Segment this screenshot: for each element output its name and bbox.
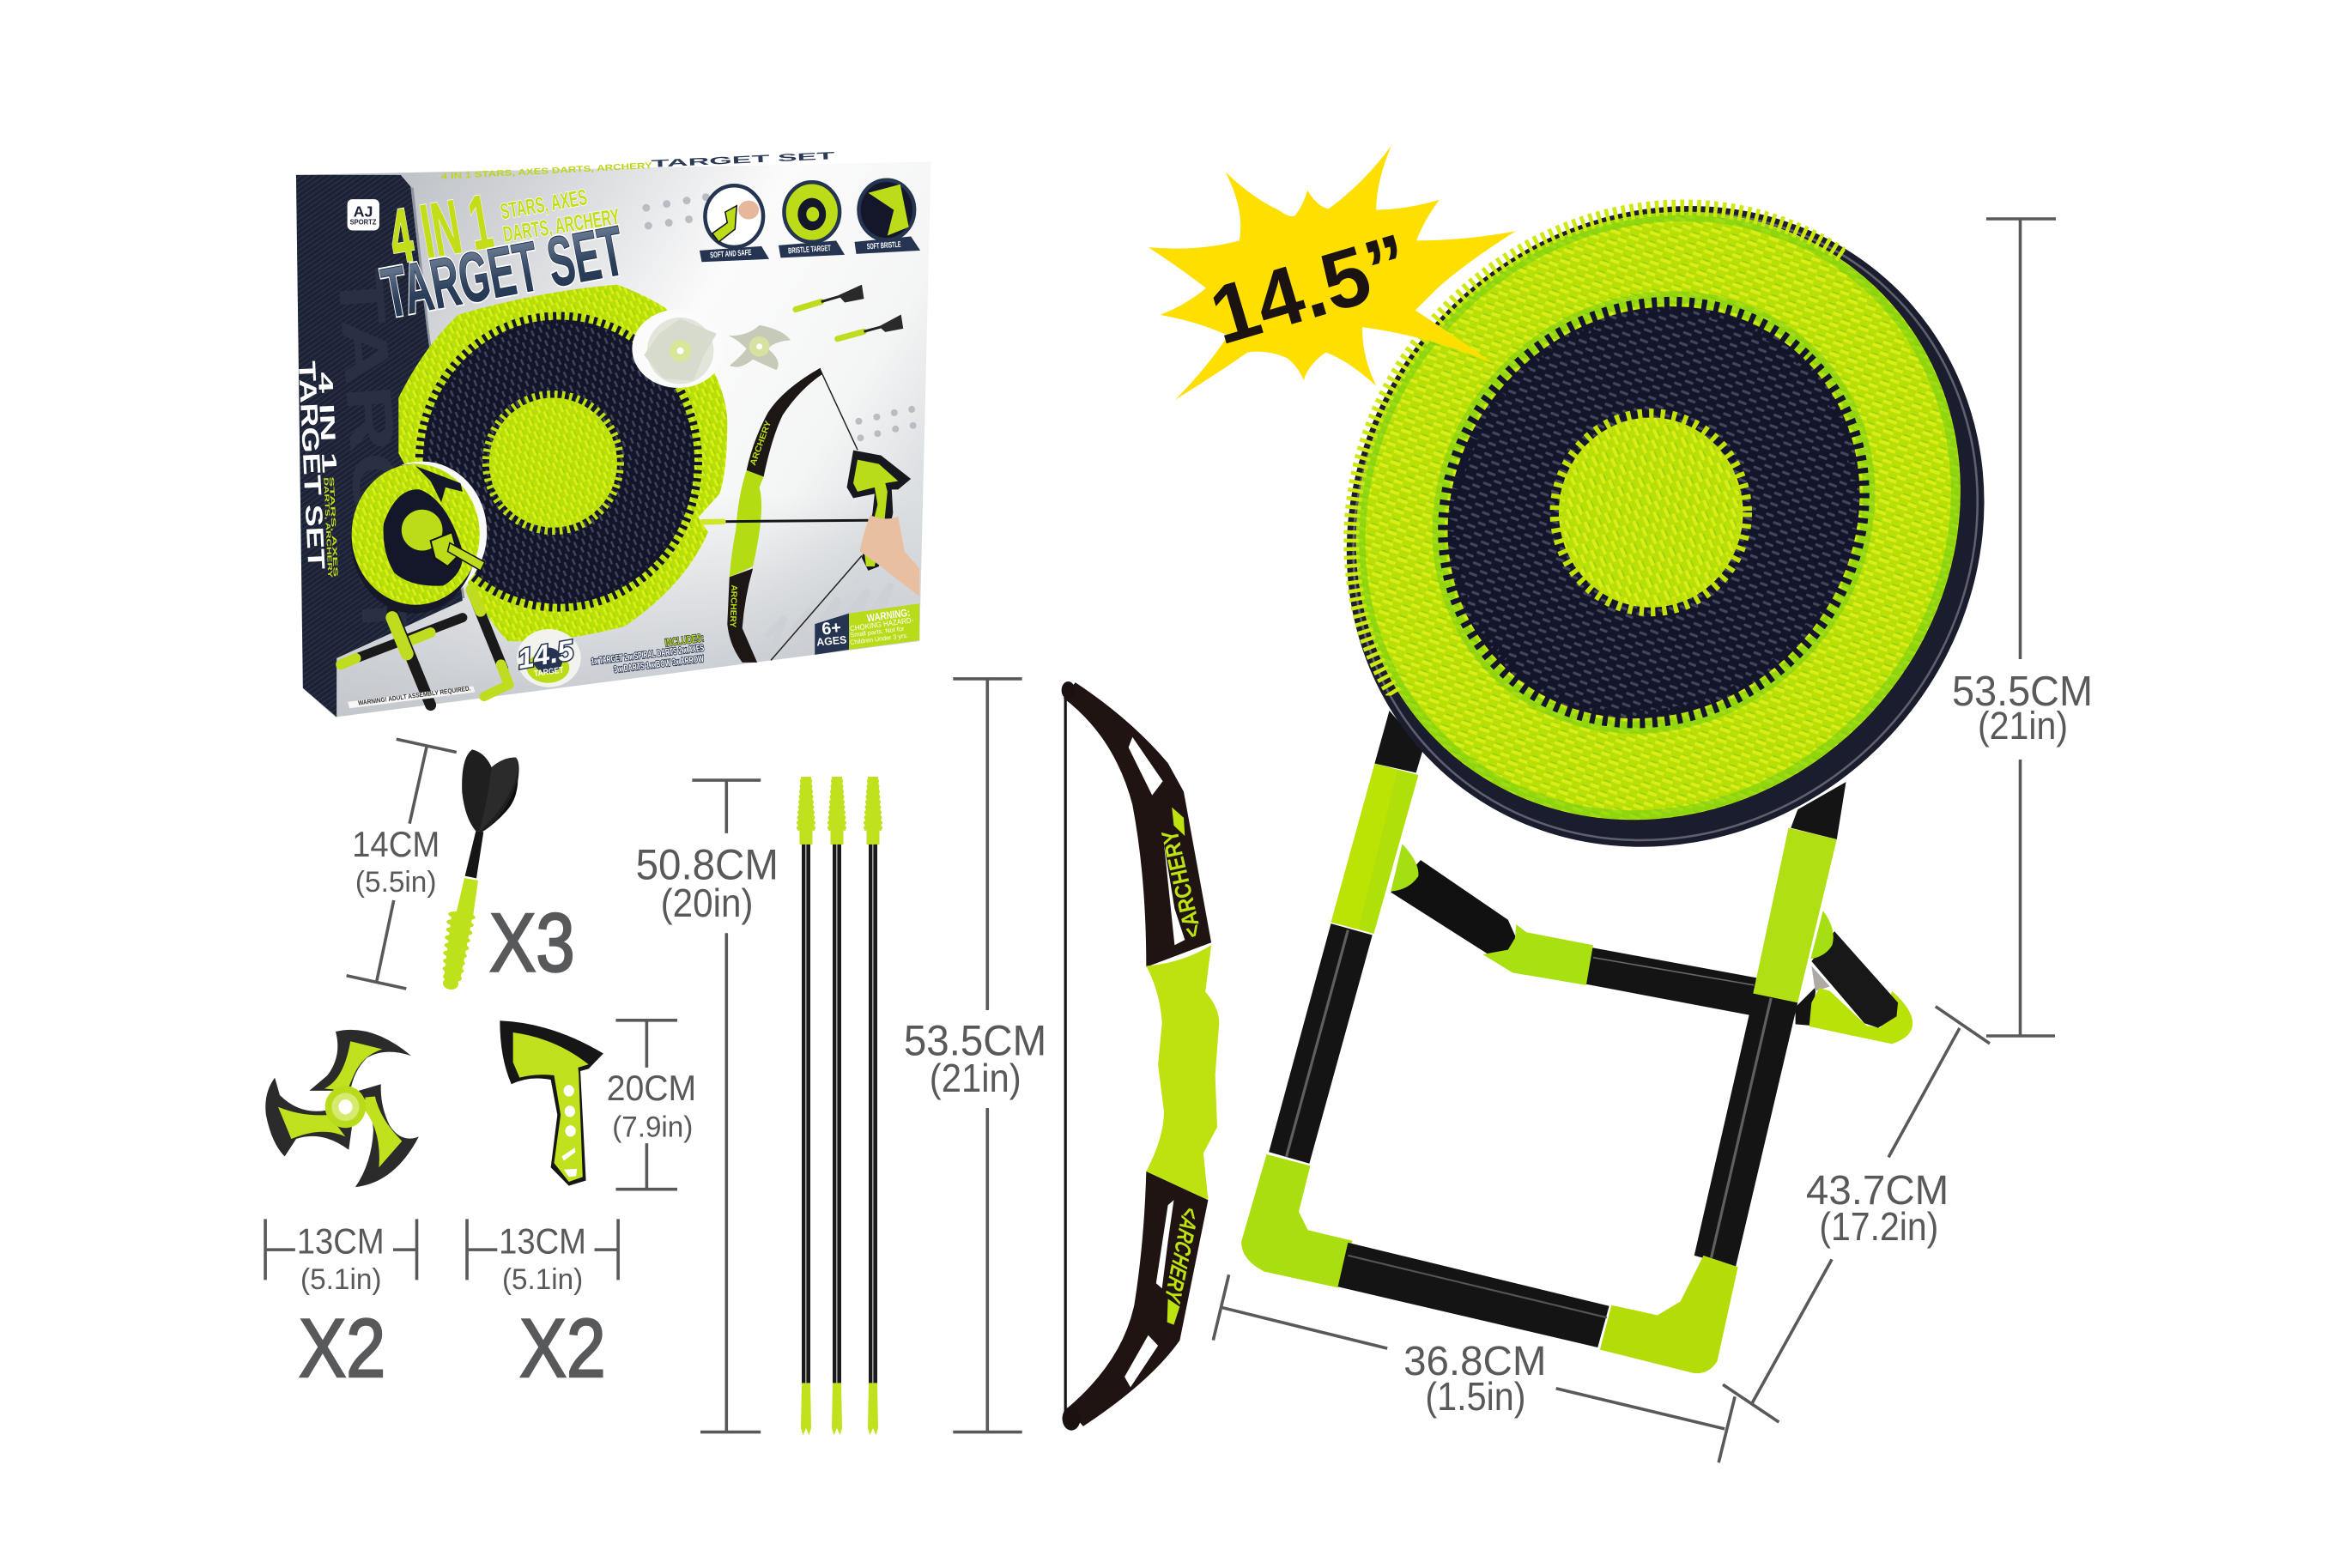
bristle face [1231,88,2086,945]
bow dimension: 53.5CM [904,1018,1046,1065]
bow dimension [904,679,1046,1432]
size badge [515,629,581,687]
box top edge text [441,149,837,182]
feature icons: SOFT AND SAFE [710,248,752,260]
upper limb windows [1129,737,1163,796]
box background chevrons [591,584,892,680]
axe and hand on box [847,451,919,596]
box top edge text: 4 IN 1 STARS, AXES DARTS, ARCHERY [441,161,653,182]
dimension: stand depth 43.7CM [1723,1007,1990,1422]
axe width dimension: (5.1in) [502,1262,583,1296]
big target on box [398,285,727,641]
box title: TARGET SET [377,212,630,333]
box spine [296,175,463,717]
star width dimension [265,1219,417,1296]
feature icons: SOFT BRISTLE [866,240,901,251]
left knob [1391,844,1418,892]
dart dimension [347,739,457,989]
left sleeve [1331,764,1418,934]
bottom tip [1063,1407,1081,1431]
dimension: stand depth 43.7CM: (17.2in) [1819,1205,1938,1249]
cross bar rear section [1796,986,1816,1026]
box title: TARGET SET [377,212,630,333]
age and warning labels [815,603,919,655]
left sleeve shade [1359,770,1418,934]
brace shadow [1811,966,1830,991]
assembly warning pill: WARNING! ADULT ASSEMBLY REQUIRED. [358,684,471,707]
lower chevron [1167,1299,1179,1325]
star width dimension: (5.1in) [300,1262,382,1296]
axe width dimension: 13CM [499,1221,586,1262]
left leg upper tube [1374,711,1423,772]
box title: STARS, AXES [499,185,589,224]
rear foot [1809,988,1913,1044]
star width dimension: 13CM [297,1221,385,1262]
dart [442,749,519,990]
lower limb windows [1124,1335,1158,1387]
brand logo [348,199,379,230]
dimension: stand height 53.5CM: 53.5CM [1952,669,2093,715]
dimension: stand width 36.8CM: (1.5in) [1425,1375,1526,1420]
size badge: 14.5 [515,633,577,675]
axe height dimension: 20CM [607,1069,696,1108]
box title: DARTS, ARCHERY [501,205,621,247]
box front face [296,161,931,717]
axe height dimension [607,1020,696,1190]
spine edge shade [401,185,464,598]
left leg lower tube [1269,923,1373,1164]
age and warning labels: Small parts. Not for [850,625,905,639]
dimension: stand depth 43.7CM: 43.7CM [1806,1167,1949,1213]
brand logo: SPORTZ [350,218,376,227]
box title: 4 IN 1 [384,179,498,280]
right sleeve [1753,828,1837,1002]
right leg lower tube [1694,993,1797,1267]
arrow 1 [797,777,815,1435]
bottom tube highlight [1348,1256,1607,1317]
center joint [1482,924,1593,985]
feature icons: BRISTLE TARGET [788,244,831,256]
spine text [294,360,341,578]
arrow 2 [827,777,846,1435]
dimension: stand width 36.8CM: 36.8CM [1403,1338,1546,1384]
bullseye [1559,418,1743,608]
box lower shade [296,161,931,717]
spine ghost lettering: TARGET [324,266,422,645]
panel: product box [294,149,931,717]
panel: accessories [265,739,696,1395]
box top edge text: TARGET SET [651,149,837,170]
age and warning labels: Children Under 3 yrs. [850,632,908,646]
blurred stars on box [644,318,791,384]
age and warning labels: WARNING: [866,607,911,625]
arrow length dimension [636,780,779,1432]
lower limb [1067,1171,1208,1426]
axe quantity: X2 [519,1302,606,1395]
bow tips [1062,681,1075,699]
darts on box [796,285,903,339]
arrow length dimension: (20in) [661,881,754,925]
includes text: 1x TARGET 2 x SPIRAL DARTS 2 x AXES [591,643,705,667]
dart quantity: X3 [489,897,575,990]
left tube highlight [1287,930,1348,1157]
right corner joint [1600,1256,1738,1373]
age and warning labels: 6+ [821,619,842,639]
ring halo [1349,209,1958,816]
dart dimension: 14CM [352,825,439,864]
arrow 3 [864,777,882,1435]
black ring bristles [1363,221,1945,803]
dart grip [442,878,478,990]
size badge: TARGET [533,666,564,679]
axe width dimension [467,1219,618,1296]
bow dimension: (21in) [930,1056,1021,1100]
target board [1149,146,1985,847]
includes text [591,631,705,675]
bottom tube [1338,1243,1609,1347]
cross bar highlight [1593,958,1754,985]
bow string [1063,690,1069,1419]
axe [500,1020,603,1186]
bow on box: ARCHERY [728,584,738,628]
includes text: INCLUDES: [664,631,705,649]
star quantity: X2 [299,1302,385,1395]
spine text: STARS, AXES [328,476,340,577]
upper limb [1064,682,1211,967]
dimension: stand height 53.5CM [1952,219,2093,1036]
right leg upper tube [1791,782,1846,839]
box title: 4 IN 1 [384,179,498,280]
axe height dimension: (7.9in) [612,1111,693,1143]
upper limb label: <ARCHERY [1156,824,1206,942]
grip [1146,945,1219,1200]
outer rim [1215,75,2116,978]
age and warning labels: CHOKING HAZARD- [849,615,914,633]
feature icons [700,180,920,262]
panel: arrow and bow dimensions with bow [636,679,1219,1432]
spine text: 4 IN 1 [313,372,341,474]
dimension: stand width 36.8CM [1213,1274,1735,1462]
upper chevron [1172,808,1185,836]
dimension: stand height 53.5CM: (21in) [1978,704,2068,748]
arrow length dimension: 50.8CM [636,841,779,889]
rear right brace [1811,931,1898,1028]
includes text: 3 x DARTS 1 x BOW 3x ARROW [613,654,705,675]
age and warning labels: AGES [816,633,847,648]
starburst callout: 14.5” [1201,217,1421,362]
lower limb label: <ARCHERY [1160,1203,1203,1307]
bow [1062,681,1219,1431]
box title [377,179,630,333]
black ring fringe [1361,221,1946,805]
cross bar [1586,947,1756,1015]
spine text: TARGET SET [294,360,330,570]
edge bristles [1343,199,1846,695]
right tube highlight [1712,998,1771,1258]
bow on box: ARCHERY [749,420,773,467]
small target with stand on box [341,462,509,705]
bow on box [702,368,868,663]
face edge shade [1238,94,2078,937]
brand logo: AJ [354,203,373,221]
decorative dots [642,193,917,441]
bullseye fringe [1557,416,1745,609]
starburst callout [1149,146,1516,400]
rim highlight [1224,84,2106,969]
left corner joint [1241,1154,1353,1287]
dart flights [462,749,519,878]
throwing star [265,1030,419,1187]
stand [1241,711,1913,1373]
right knob [1810,911,1834,959]
dart dimension: (5.5in) [355,865,436,899]
spine text: DARTS, ARCHERY [322,477,334,578]
left diagonal brace [1391,860,1516,957]
